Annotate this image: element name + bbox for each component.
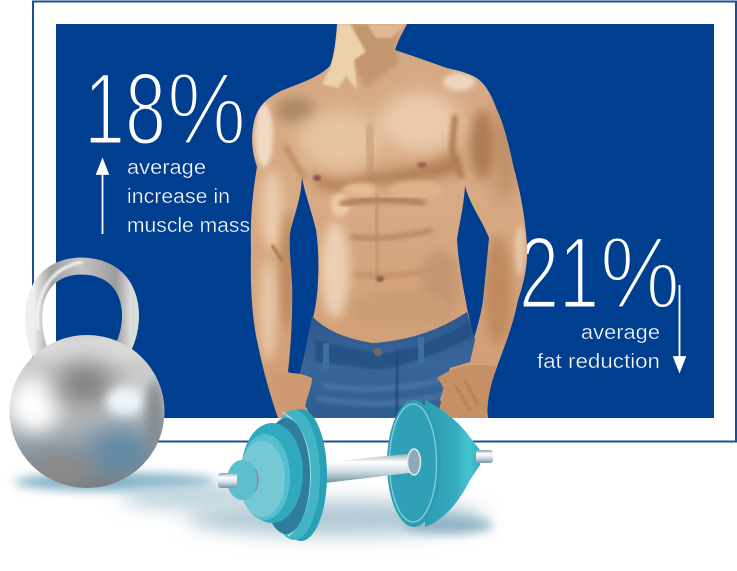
figure 18%: 18: [84, 52, 166, 166]
kettlebell: [10, 262, 165, 488]
label: average fat reduction: average: [581, 321, 660, 344]
chest: [298, 110, 382, 170]
left hand: [272, 373, 312, 418]
belt loops and button: [323, 337, 424, 369]
far plate hub: [408, 449, 420, 475]
jeans: [301, 312, 475, 418]
forearm details: [272, 245, 283, 262]
middle plate: [241, 423, 303, 523]
figure 21%: 21: [519, 216, 599, 330]
arrow down: [674, 285, 685, 371]
photo: shirtless torso with jeans: [245, 20, 535, 420]
dumbbell: [218, 400, 493, 541]
label: average fat reduction: fat reduction: [537, 350, 660, 373]
nipples: [313, 175, 321, 181]
figure 21%: %: [600, 216, 680, 330]
label: average fat reduction: [537, 321, 660, 373]
label: average increase in muscle mass: [127, 156, 250, 237]
abdominal muscles: [330, 193, 350, 217]
ball: [10, 335, 164, 488]
blue panel: [56, 24, 714, 418]
label: average increase in muscle mass: average: [127, 156, 206, 179]
background frame: [33, 2, 736, 442]
far weight stack: [425, 400, 480, 527]
arrow up: [97, 160, 108, 234]
stat: 21% fat reduction: [519, 216, 685, 373]
bar rod: [325, 453, 418, 483]
stat: 18% muscle mass increase: [84, 52, 250, 237]
figure 18%: %: [167, 52, 246, 166]
label: average increase in muscle mass: muscle mass: [127, 214, 250, 237]
floor shadows: [15, 473, 493, 536]
navel: [376, 276, 384, 282]
right hand: [437, 365, 497, 418]
main plate far: [387, 400, 441, 527]
gap between left arm and torso: [288, 177, 318, 376]
inner plate: [239, 441, 285, 517]
handle: [34, 266, 131, 358]
far bar end: [476, 450, 493, 463]
gap between right arm and torso: [457, 186, 489, 338]
near bar end: [218, 473, 237, 488]
shoulder and upper arm highlights: [255, 103, 273, 167]
near large plate: [275, 409, 327, 541]
collar: [227, 460, 257, 500]
neck and chin shading: [352, 24, 400, 88]
label: average increase in muscle mass: increase in: [127, 185, 230, 208]
jeans waistband: [315, 322, 473, 370]
